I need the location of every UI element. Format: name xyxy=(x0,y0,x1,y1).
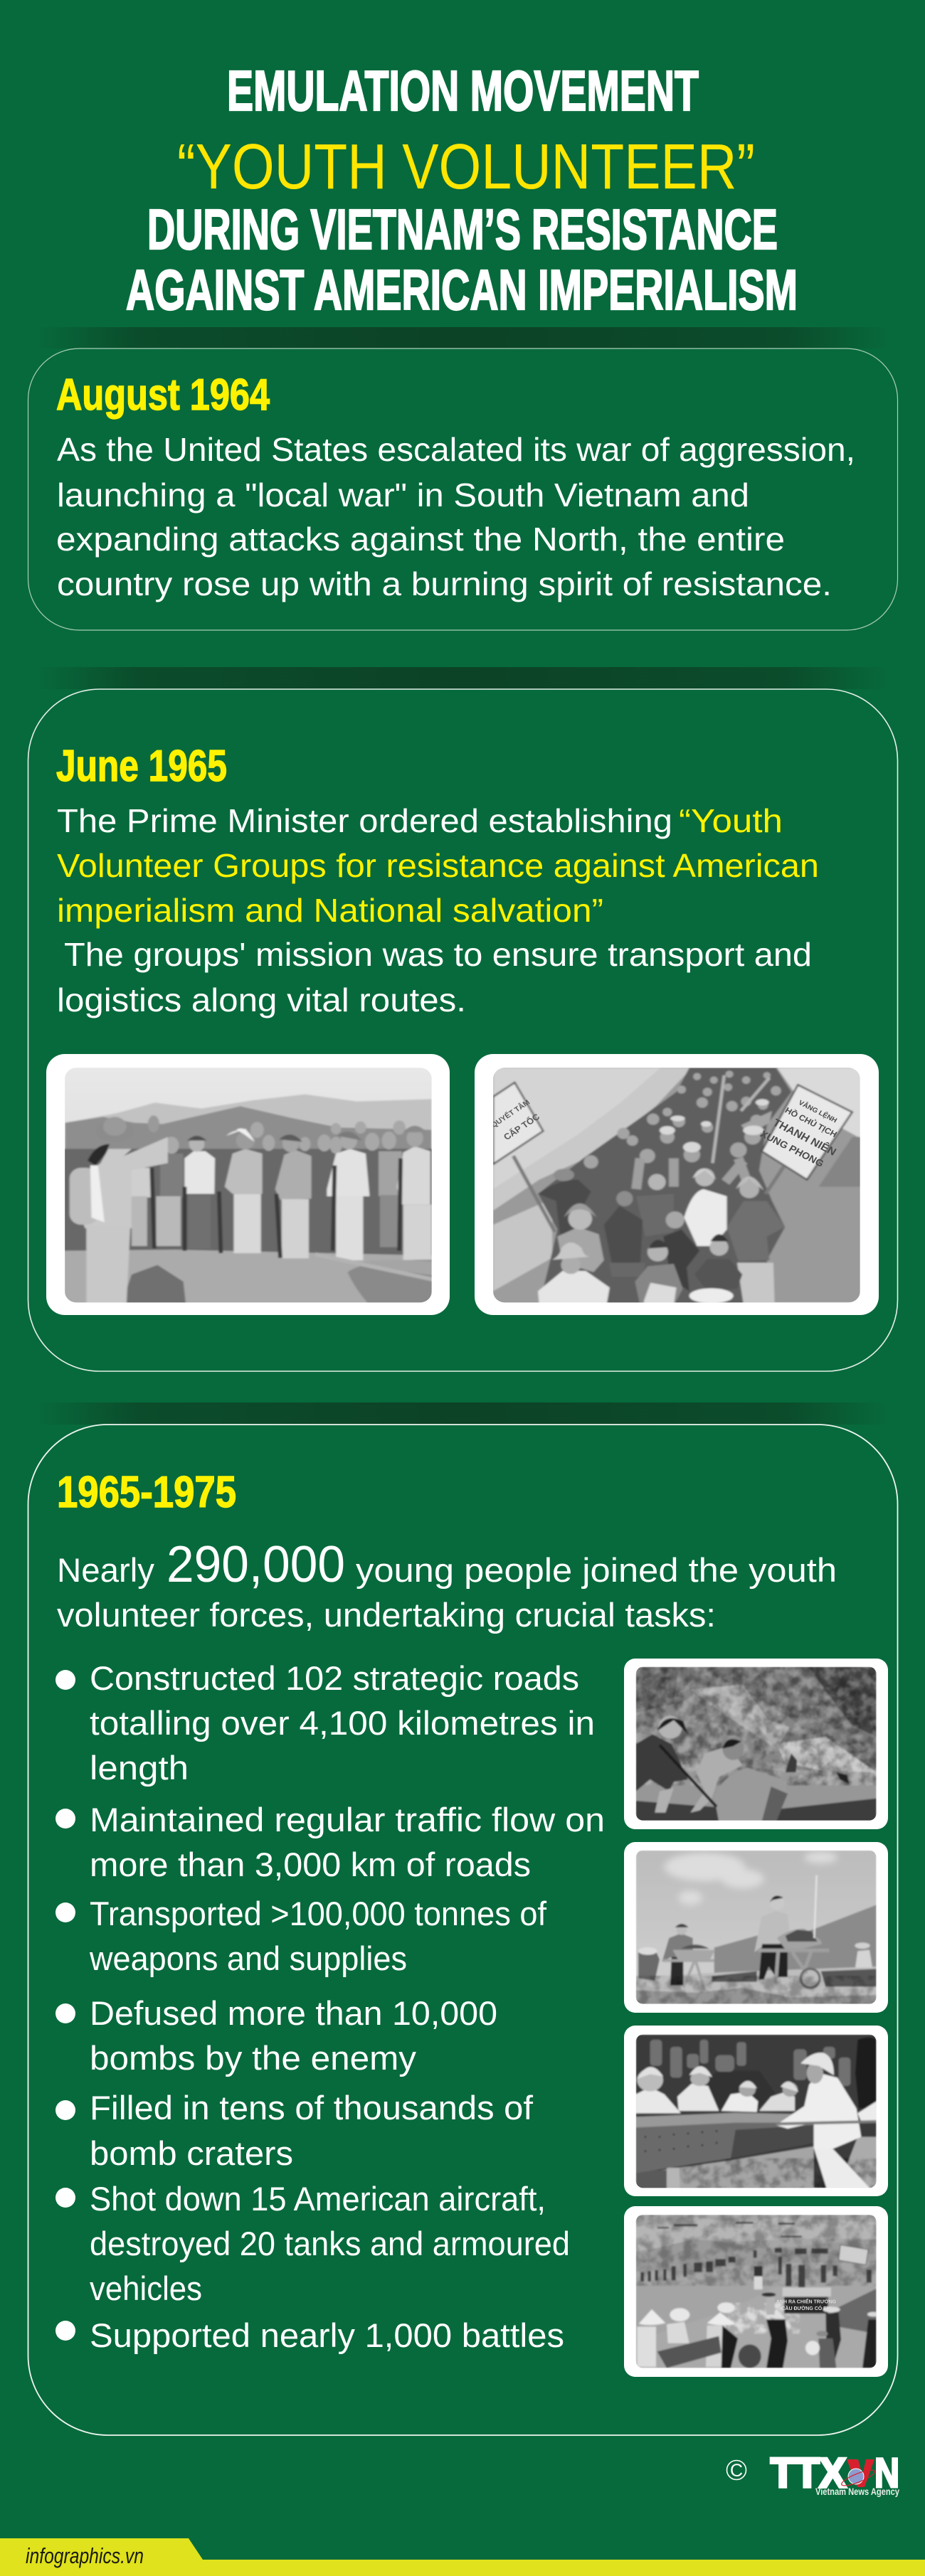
photo: women volunteers lined up xyxy=(46,1054,450,1315)
photo: construction site with crowd: CẦU ĐƯỜNG CÓ EM xyxy=(781,2304,831,2311)
bullet: traffic flow xyxy=(56,1801,605,1883)
photo: road workers with wheelbarrows xyxy=(624,1842,888,2013)
panel: August 1964 xyxy=(28,348,898,630)
photo: construction site with crowd: ANH RA CHIẾN TRƯỜNG xyxy=(776,2298,837,2305)
bullet: traffic flow: Maintained regular traffic flow on xyxy=(90,1801,605,1838)
photo: construction site with crowd xyxy=(624,2206,888,2377)
footer source text: infographics.vn xyxy=(26,2543,144,2568)
text block: August 1964 description: expanding attacks against the North, the entire xyxy=(56,521,785,558)
bullet: roads constructed: length xyxy=(90,1749,189,1787)
text block: August 1964 description: country rose up with a burning spirit of resistance. xyxy=(57,565,832,602)
text block: August 1964 description xyxy=(56,431,855,602)
photo: youth marching with signs xyxy=(475,1054,879,1315)
intro text with 290,000 figure: young people joined the youth xyxy=(356,1551,837,1589)
bullet: tonnes transported: Transported >100,000 tonnes of xyxy=(90,1895,547,1932)
photo: workers moving boulder xyxy=(624,1659,888,1829)
copyright symbol: C xyxy=(730,2461,743,2481)
bullet: traffic flow: more than 3,000 km of roads xyxy=(90,1846,531,1883)
bullet: battles supported: Supported nearly 1,000 battles xyxy=(90,2316,564,2354)
title: EMULATION MOVEMENT xyxy=(227,59,699,122)
title: “YOUTH VOLUNTEER” xyxy=(177,132,755,203)
logo: TTXVN Vietnam News Agency: Vietnam News Agency xyxy=(815,2486,899,2497)
photo: youth marching with signs: HỒ CHỦ TỊCH xyxy=(783,1105,839,1139)
text block: June 1965 description: The groups' mission was to ensure transport and xyxy=(64,936,812,973)
heading: June 1965: June 1965 xyxy=(56,742,227,791)
bullet: roads constructed: Constructed 102 strategic roads xyxy=(90,1659,579,1697)
photo: crew lifting steel girder xyxy=(624,2026,888,2196)
logo: TTXVN Vietnam News Agency xyxy=(771,2450,899,2497)
panel: June 1965 xyxy=(28,689,898,1371)
intro text with 290,000 figure xyxy=(57,1536,837,1634)
text block: June 1965 description: The Prime Minister ordered establishing xyxy=(57,802,672,839)
photo: youth marching with signs: THANH NIÊN xyxy=(771,1117,838,1159)
intro text with 290,000 figure: Nearly xyxy=(57,1551,154,1589)
photo: youth marching with signs: VÂNG LỆNH xyxy=(797,1099,838,1124)
text block: August 1964 description: As the United States escalated its war of aggression, xyxy=(57,431,855,468)
heading: August 1964: August 1964 xyxy=(56,371,270,420)
title xyxy=(126,59,798,321)
text block: June 1965 description xyxy=(57,802,819,1018)
bullet: aircraft shot down: Shot down 15 American aircraft, xyxy=(90,2180,546,2218)
footer bar xyxy=(0,2538,925,2576)
bullet: roads constructed xyxy=(56,1659,595,1787)
intro text with 290,000 figure: volunteer forces, undertaking crucial tasks: xyxy=(57,1596,716,1634)
photo: youth marching with signs: CẤP TỐC xyxy=(502,1112,541,1142)
bullet: aircraft shot down: destroyed 20 tanks and armoured xyxy=(90,2225,570,2262)
text block: August 1964 description: launching a "local war" in South Vietnam and xyxy=(57,477,749,513)
heading: 1965-1975: 1965-1975 xyxy=(57,1468,236,1517)
photo: youth marching with signs: QUYẾT TÂM xyxy=(489,1097,532,1129)
bullet: bombs defused: Defused more than 10,000 xyxy=(90,1994,497,2032)
bullet: craters filled: bomb craters xyxy=(90,2134,293,2172)
bullet: roads constructed: totalling over 4,100 kilometres in xyxy=(90,1704,595,1742)
bullet: bombs defused: bombs by the enemy xyxy=(90,2039,417,2077)
panel: 1965-1975 xyxy=(28,1425,898,2435)
text block: June 1965 description: Volunteer Groups for resistance against American xyxy=(57,847,819,884)
bullet: craters filled xyxy=(56,2089,534,2172)
logo: TTXVN Vietnam News Agency: TTX xyxy=(771,2450,846,2496)
bullet: aircraft shot down xyxy=(56,2180,570,2307)
text block: June 1965 description: imperialism and National salvation” xyxy=(57,892,603,929)
photo: youth marching with signs: XUNG PHONG xyxy=(758,1128,826,1169)
intro text with 290,000 figure: 290,000 xyxy=(166,1536,345,1593)
text block: June 1965 description: logistics along vital routes. xyxy=(57,981,466,1018)
bullet: bombs defused xyxy=(56,1994,497,2077)
bullet: craters filled: Filled in tens of thousands of xyxy=(90,2089,534,2127)
bullet: tonnes transported xyxy=(56,1895,547,1977)
text block: June 1965 description: “Youth xyxy=(679,802,783,839)
copyright symbol xyxy=(727,2461,746,2481)
bullet: tonnes transported: weapons and supplies xyxy=(89,1939,407,1977)
bullet: aircraft shot down: vehicles xyxy=(90,2269,202,2307)
logo: TTXVN Vietnam News Agency: N xyxy=(874,2450,899,2496)
